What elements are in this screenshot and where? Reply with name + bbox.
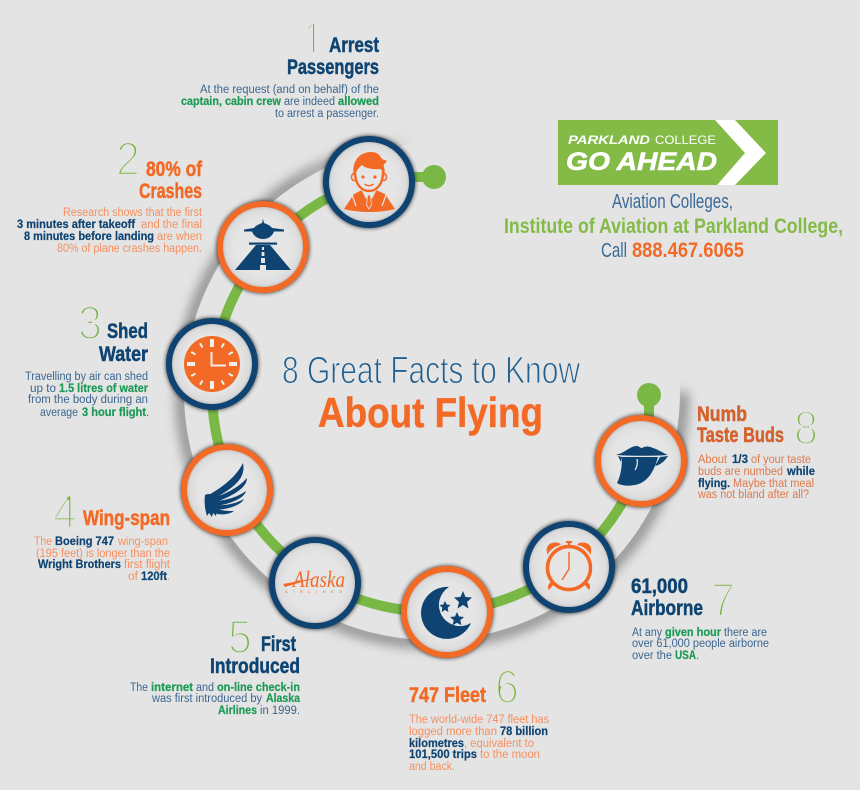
- call to action text: Call: [601, 240, 627, 262]
- body text: The: [130, 682, 148, 694]
- heading: [210, 632, 300, 678]
- body text: kilometres: [409, 738, 464, 750]
- body text: Wright Brothers: [38, 559, 121, 571]
- heading: First: [261, 632, 296, 656]
- heading: Numb: [697, 402, 747, 426]
- fact 8: [697, 401, 818, 501]
- heading: Passengers: [287, 55, 379, 79]
- timeline end dot: [637, 383, 661, 407]
- circle 8: tongue: [595, 415, 687, 507]
- number 8: 8: [794, 401, 818, 454]
- call to action text: 888.467.6065: [632, 239, 744, 262]
- fact 5: [130, 610, 301, 717]
- body text: [25, 371, 149, 419]
- circle 5: airline logo: [269, 537, 361, 629]
- body text: captain, cabin crew: [181, 96, 281, 108]
- icon: moon and stars: [421, 587, 472, 639]
- body text: Research shows that the first: [63, 207, 203, 219]
- body text: there are: [724, 627, 767, 639]
- heading: [697, 402, 784, 447]
- body text: .: [696, 650, 699, 662]
- heading: Water: [99, 342, 149, 366]
- timeline start dot: [422, 165, 446, 189]
- green timeline arc: [212, 177, 649, 612]
- body text: and the final: [141, 219, 202, 231]
- circle 7: alarm clock: [523, 521, 615, 613]
- body text: Boeing 747: [55, 536, 114, 548]
- title: [282, 350, 580, 436]
- body text: 3 minutes after takeoff: [17, 219, 135, 231]
- logo: Parkland College: [558, 120, 778, 185]
- body text: flying.: [698, 478, 730, 490]
- body text: 80% of plane crashes happen.: [57, 243, 202, 255]
- body text: and: [196, 682, 214, 694]
- icon: cabin crew person: [344, 152, 395, 212]
- body text: , equivalent to: [464, 738, 534, 750]
- body text: [181, 84, 379, 120]
- body text: first flight: [124, 559, 171, 571]
- body text: [34, 536, 171, 583]
- body text: About: [698, 454, 728, 466]
- icon: clock face: [184, 336, 240, 392]
- body text: [17, 207, 203, 255]
- body text: 101,500 trips: [409, 749, 477, 761]
- icon: wing: [205, 463, 247, 517]
- logo: Parkland College: COLLEGE: [655, 135, 716, 147]
- body text: At any: [632, 627, 662, 639]
- heading: Airborne: [631, 596, 703, 620]
- body text: of your taste: [751, 454, 811, 466]
- fact 2: [17, 132, 203, 255]
- body text: internet: [151, 682, 193, 694]
- number 6: 6: [495, 660, 519, 713]
- body text: of: [128, 571, 139, 583]
- body text: and back.: [409, 761, 455, 773]
- body text: was first introduced by: [151, 693, 262, 705]
- call to action text: Aviation Colleges,: [612, 191, 733, 213]
- body text: The: [34, 536, 52, 548]
- fact 1: [181, 24, 380, 120]
- body text: USA: [675, 650, 696, 662]
- title line 2: About Flying: [318, 389, 543, 436]
- heading: 61,000: [631, 574, 688, 598]
- fact 6: [409, 660, 549, 773]
- heading: [631, 574, 703, 620]
- body text: wing-span: [117, 536, 168, 548]
- heading: 747 Fleet: [409, 683, 486, 707]
- icon: Alaska Airlines wordmark: AIRLINES: [285, 589, 342, 594]
- fact 7: [631, 573, 769, 662]
- body text: 1.5 litres of water: [59, 383, 148, 395]
- body text: while: [786, 466, 815, 478]
- call to action text: [504, 191, 843, 262]
- circle 2: runway: [217, 201, 309, 293]
- icon: plane over runway: [235, 219, 291, 270]
- icon: Alaska Airlines wordmark: Alaska: [291, 567, 345, 592]
- body text: are indeed: [284, 96, 335, 108]
- heading: Crashes: [139, 179, 202, 203]
- heading: [139, 157, 203, 203]
- body text: logged more than: [409, 726, 497, 738]
- number 7: 7: [711, 573, 735, 626]
- body text: [632, 627, 769, 662]
- body text: allowed: [338, 96, 379, 108]
- circle 4: wing: [181, 444, 273, 536]
- circle 6: moon and stars: [401, 566, 493, 658]
- body text: .: [167, 571, 170, 583]
- body text: 1/3: [732, 454, 748, 466]
- heading: Shed: [107, 319, 148, 343]
- logo: Parkland College: PARKLAND: [568, 135, 650, 147]
- icon: tongue and lips: [616, 446, 668, 486]
- disc shadow: [182, 142, 682, 642]
- number 5: 5: [228, 610, 252, 663]
- body text: given hour: [665, 627, 721, 639]
- body text: to the moon: [480, 749, 540, 761]
- body text: are when: [157, 231, 202, 243]
- heading: Arrest: [329, 33, 379, 57]
- body text: 78 billion: [500, 726, 548, 738]
- body text: Alaska: [266, 693, 301, 705]
- body text: 3 hour flight: [82, 407, 146, 419]
- body text: average: [40, 407, 78, 419]
- body text: in 1999.: [260, 705, 300, 717]
- fact 4: [34, 485, 171, 583]
- body text: Maybe that meal: [733, 478, 814, 490]
- body text: over the: [632, 650, 672, 662]
- logo: Parkland College: GO AHEAD: [566, 148, 717, 176]
- number 4: 4: [53, 485, 77, 538]
- body text: to arrest a passenger.: [275, 108, 379, 120]
- body text: on-line check-in: [217, 682, 300, 694]
- heading: [287, 33, 379, 79]
- icon: alarm clock: [547, 541, 591, 590]
- heading: Introduced: [210, 654, 300, 678]
- circle 3: clock: [166, 318, 258, 410]
- body text: The world-wide 747 fleet has: [409, 714, 549, 726]
- heading: 80% of: [146, 157, 203, 181]
- body text: [409, 714, 549, 773]
- icon: Alaska Airlines wordmark: [283, 567, 345, 594]
- body text: .: [146, 407, 149, 419]
- body text: was not bland after all?: [697, 489, 809, 501]
- body text: 120ft: [141, 571, 167, 583]
- body text: up to: [30, 383, 56, 395]
- heading: Wing-span: [83, 506, 170, 530]
- body text: 8 minutes before landing: [24, 231, 154, 243]
- body text: from the body during an: [28, 394, 148, 406]
- body text: (195 feet) is longer than the: [36, 548, 170, 560]
- circle 1: crew member: [323, 136, 415, 228]
- fact 3: [25, 296, 149, 419]
- number 3: 3: [78, 296, 102, 349]
- body text: Travelling by air can shed: [25, 371, 148, 383]
- number 1: 1: [304, 12, 322, 65]
- body text: [130, 682, 301, 717]
- number 2: 2: [116, 132, 140, 185]
- body text: [697, 454, 815, 501]
- body text: At the request (and on behalf) of the: [200, 84, 379, 96]
- heading: Taste Buds: [697, 423, 784, 447]
- body text: Airlines: [218, 705, 257, 717]
- body text: over 61,000 people airborne: [632, 638, 769, 650]
- title line 1: 8 Great Facts to Know: [282, 350, 580, 392]
- heading: [99, 319, 149, 366]
- body text: buds are numbed: [698, 466, 783, 478]
